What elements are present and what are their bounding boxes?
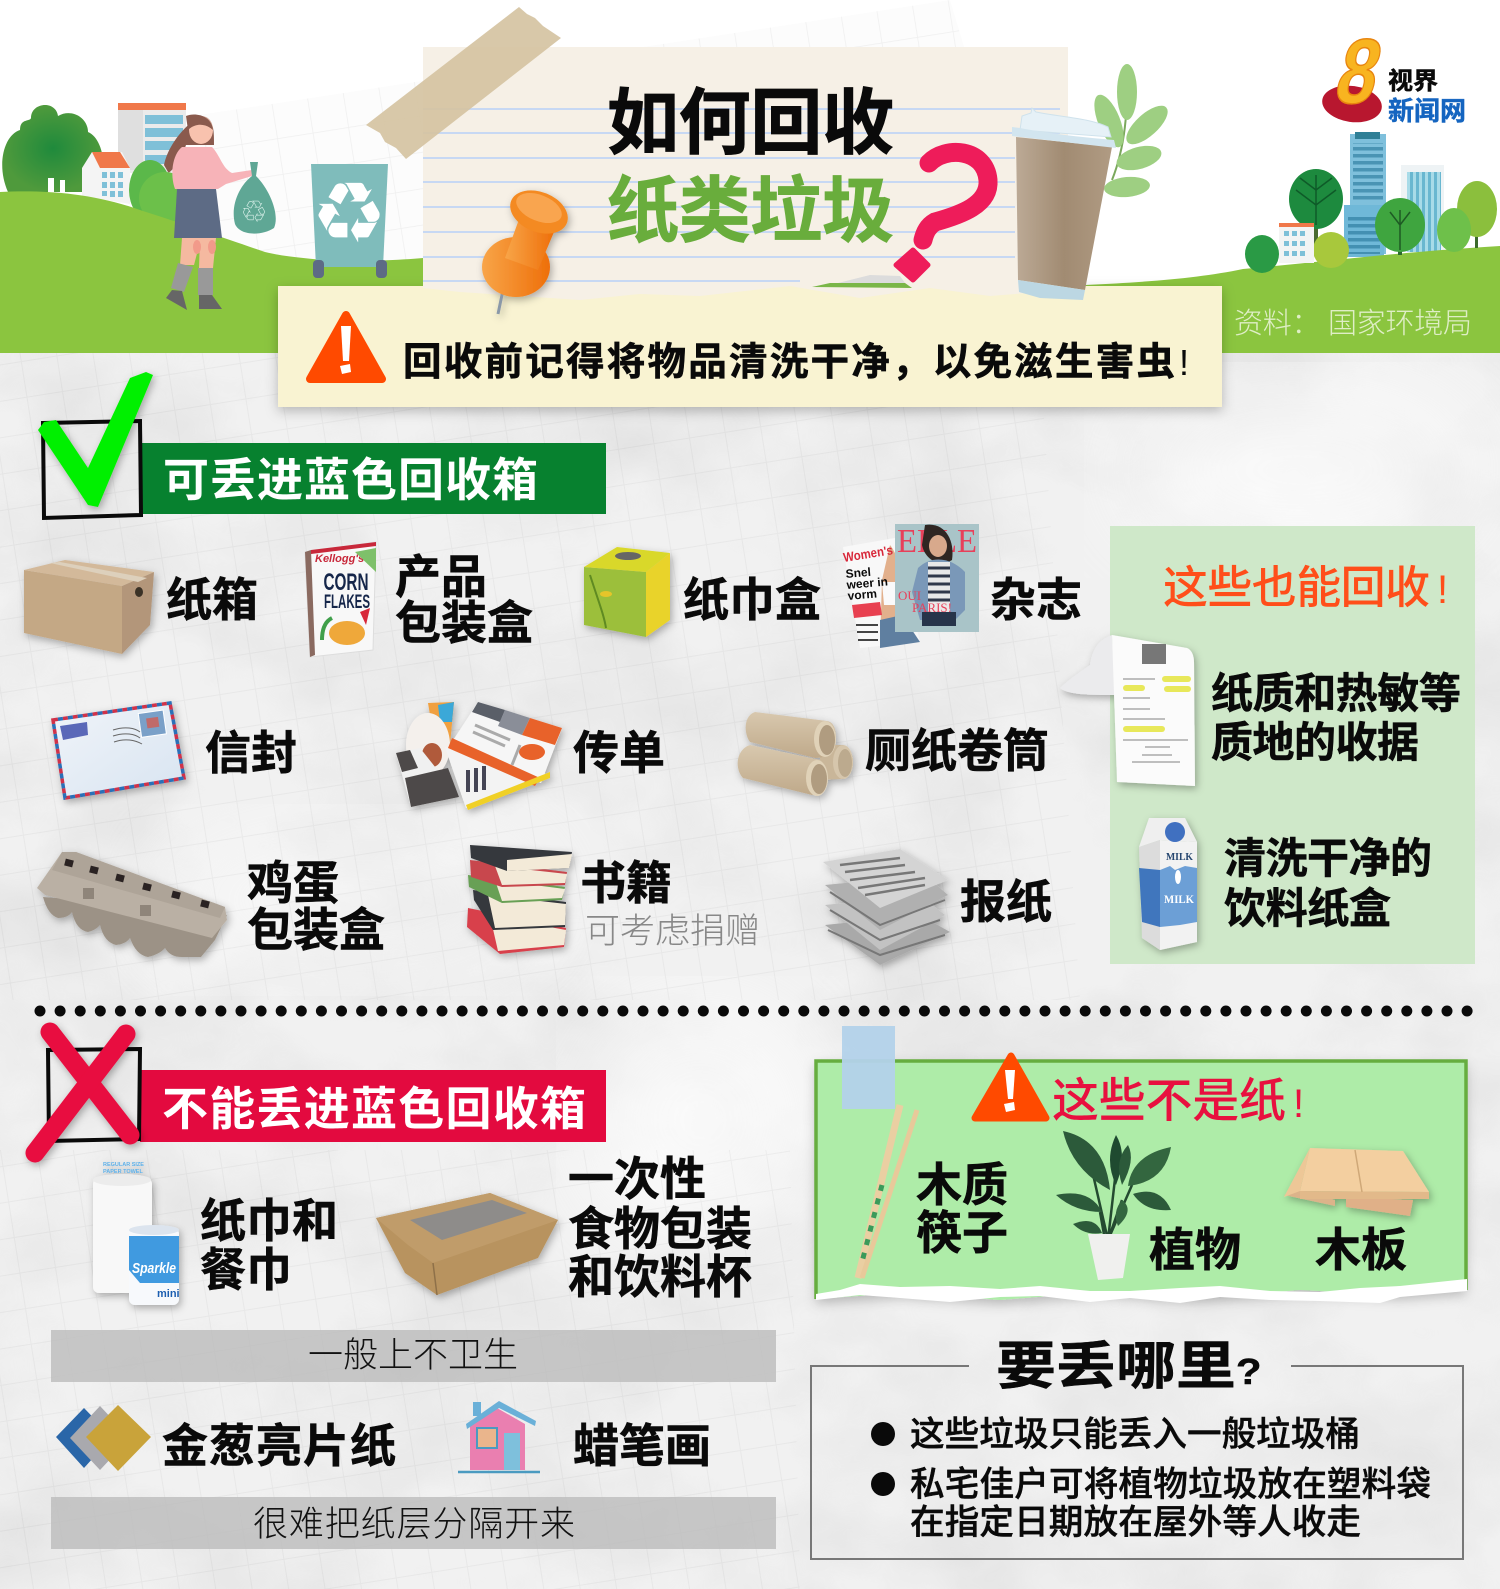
logo: 8 world news — [1320, 20, 1466, 126]
icon: recycling bin: ♻ — [311, 164, 387, 262]
icon: blue tape — [842, 1026, 895, 1109]
icon: masking tape — [366, 7, 561, 159]
icon: cereal box — [305, 542, 376, 657]
icon: wooden chopsticks — [858, 1105, 917, 1278]
icon: house — [82, 152, 130, 204]
panel: not paper — [816, 1026, 1467, 1303]
icon: glitter paper — [56, 1405, 151, 1471]
icon: paper towels: PAPER TOWEL — [103, 1169, 143, 1175]
icon: tall building — [118, 103, 186, 173]
label: receipts: 纸质和热敏等 — [1211, 670, 1461, 717]
torn edge — [816, 1279, 1467, 1303]
icon: magazines: PARIS! — [912, 600, 952, 615]
label: product packaging: 产品 — [395, 551, 487, 603]
heading: not paper: 这些不是纸 — [1052, 1074, 1286, 1127]
heading: also recyclable: 这些也能回收 — [1163, 562, 1430, 613]
warning mark: ! — [1179, 342, 1189, 383]
label: egg carton: 包装盒 — [247, 904, 385, 956]
icon: skyscrapers — [1344, 132, 1444, 257]
icon: wooden boards — [1284, 1148, 1429, 1216]
label: cardboard box: 纸箱 — [166, 574, 258, 626]
label: product packaging: 包装盒 — [395, 597, 533, 649]
illustration: right city — [1085, 132, 1500, 353]
label: plants: 植物 — [1149, 1224, 1241, 1276]
icon: crayon drawing — [458, 1401, 540, 1472]
icon: milk carton — [1139, 818, 1197, 950]
notepaper title card — [423, 47, 1068, 300]
heading bar: recyclable: 可丢进蓝色回收箱 — [163, 454, 538, 506]
label: tissue and napkins — [200, 1195, 338, 1296]
exclamation: ! — [1293, 1082, 1304, 1126]
icon: cereal box: Kellogg's — [315, 553, 364, 565]
icon: flyers — [396, 702, 562, 810]
panel: also recyclable — [1060, 526, 1475, 964]
icon: paper towels: Sparkle — [132, 1260, 176, 1277]
icon: magazines: ELLE — [897, 523, 977, 560]
heading bar: recyclable — [140, 443, 606, 514]
title line 2: 纸类垃圾 — [607, 172, 894, 252]
bullet 2: 私宅佳户可将植物垃圾放在塑料袋 — [910, 1466, 1431, 1504]
green hill left — [0, 191, 423, 353]
label: flyers: 传单 — [573, 727, 665, 779]
icon: airmail envelope — [53, 703, 184, 798]
warning banner — [278, 286, 1222, 407]
icon: potted plant — [1056, 1131, 1171, 1280]
note bar: unhygienic — [51, 1330, 776, 1382]
label: product packaging — [395, 551, 533, 649]
label: books: 可考虑捐赠 — [585, 912, 760, 951]
heading: where to throw: 要丢哪里? — [996, 1337, 1262, 1395]
icon: magazines: weer in — [845, 574, 888, 592]
panel: where to throw — [811, 1337, 1463, 1559]
icon: magazines: vorm — [847, 586, 877, 603]
icon: cereal box: CORN — [324, 569, 368, 596]
icon: red cross — [35, 1032, 130, 1153]
icon: food box — [376, 1193, 558, 1295]
green hill right — [1085, 246, 1500, 353]
icon: checkbox — [48, 1049, 140, 1141]
icon: newspapers — [823, 849, 950, 965]
logo: 8 world news: 新闻网 — [1388, 96, 1466, 126]
bullet 1: 这些垃圾只能丢入一般垃圾桶 — [910, 1416, 1360, 1454]
label: egg carton: 鸡蛋 — [247, 857, 339, 909]
title line 1: 如何回收 — [607, 84, 894, 164]
label: egg carton — [247, 857, 385, 956]
label: receipts — [1211, 670, 1461, 766]
label: drink cartons — [1224, 835, 1432, 932]
note bar: layers — [51, 1497, 776, 1549]
heading bar: not recyclable: 不能丢进蓝色回收箱 — [162, 1083, 586, 1135]
label: food containers: 和饮料杯 — [568, 1251, 752, 1303]
icon: bushes — [129, 160, 191, 224]
illustration: left town — [0, 103, 423, 353]
label: food containers: 一次性 — [568, 1153, 706, 1205]
label: wooden boards: 木板 — [1315, 1224, 1407, 1276]
label: books: 书籍 — [580, 857, 672, 909]
label: crayon drawing: 蜡笔画 — [573, 1420, 711, 1472]
icon: magazines: Women's — [842, 542, 894, 565]
icon: milk carton: MILK — [1164, 894, 1194, 906]
label: tissue and napkins: 餐巾 — [200, 1244, 292, 1296]
note bar: unhygienic: 一般上不卫生 — [308, 1336, 518, 1375]
icon: cardboard box — [24, 560, 154, 654]
label: envelope: 信封 — [205, 727, 297, 779]
icon: magazines — [842, 523, 979, 648]
icon: checkbox — [43, 421, 141, 518]
icon: thermal receipt — [1060, 635, 1195, 786]
label: chopsticks: 筷子 — [916, 1207, 1008, 1259]
bullet 2: 在指定日期放在屋外等人收走 — [910, 1504, 1361, 1542]
icon: milk carton: MILK — [1166, 852, 1194, 863]
icon: red question mark — [896, 152, 988, 280]
label: books — [580, 857, 760, 951]
logo: 8 world news: 视界 — [1388, 68, 1438, 95]
icon: trees — [1245, 169, 1497, 273]
icon: woman with bag: ♲ — [241, 195, 267, 230]
label: magazines: 杂志 — [990, 574, 1082, 626]
warning text: 回收前记得将物品清洗干净，以免滋生害虫 — [403, 341, 1175, 384]
source credit: 资料： 国家环境局 — [1234, 307, 1472, 340]
exclamation: ! — [1437, 568, 1448, 612]
label: tissue and napkins: 纸巾和 — [200, 1195, 338, 1247]
label: glitter paper: 金葱亮片纸 — [162, 1420, 396, 1472]
icon: warning triangle — [310, 315, 382, 379]
icon: orange push pin — [482, 182, 574, 314]
label: food containers: 食物包装 — [568, 1203, 752, 1255]
icon: paper towels — [93, 1162, 180, 1305]
label: newspapers: 报纸 — [960, 876, 1052, 928]
icon: tissue box — [584, 547, 670, 637]
section: recyclable — [24, 372, 1082, 965]
label: toilet paper rolls: 厕纸卷筒 — [865, 725, 1049, 777]
label: receipts: 质地的收据 — [1211, 719, 1419, 766]
icon: small house — [1279, 223, 1314, 263]
bullet 2 — [871, 1466, 1431, 1542]
icon: woman with bag — [164, 115, 276, 310]
icon: paper towels: REGULAR SIZE — [103, 1162, 144, 1168]
icon: warning triangle — [975, 1056, 1046, 1118]
icon: cereal box: FLAKES — [324, 592, 370, 613]
label: food containers — [568, 1153, 752, 1303]
icon: green check — [38, 372, 153, 507]
icon: stack of books — [467, 845, 572, 954]
icon: toilet paper rolls — [738, 712, 853, 796]
icon: big tree — [2, 105, 104, 194]
logo: 8 world news: 8 — [1327, 20, 1391, 123]
section: not recyclable — [35, 1032, 776, 1549]
label: tissue box: 纸巾盒 — [683, 574, 821, 626]
icon: magazines: Snel — [845, 565, 872, 581]
panel border — [816, 1061, 1466, 1299]
heading bar: not recyclable — [140, 1070, 606, 1142]
label: drink cartons: 饮料纸盒 — [1224, 885, 1391, 932]
note bar: layers: 很难把纸层分隔开来 — [253, 1505, 575, 1544]
label: chopsticks — [916, 1159, 1008, 1259]
label: drink cartons: 清洗干净的 — [1224, 835, 1432, 882]
icon: paper coffee cup — [1012, 108, 1116, 300]
icon: egg carton — [37, 852, 227, 957]
icon: magazines: OUI — [898, 588, 921, 603]
icon: leaf sprig — [1088, 64, 1174, 199]
label: chopsticks: 木质 — [916, 1159, 1008, 1211]
icon: paper towels: mini — [157, 1288, 180, 1300]
